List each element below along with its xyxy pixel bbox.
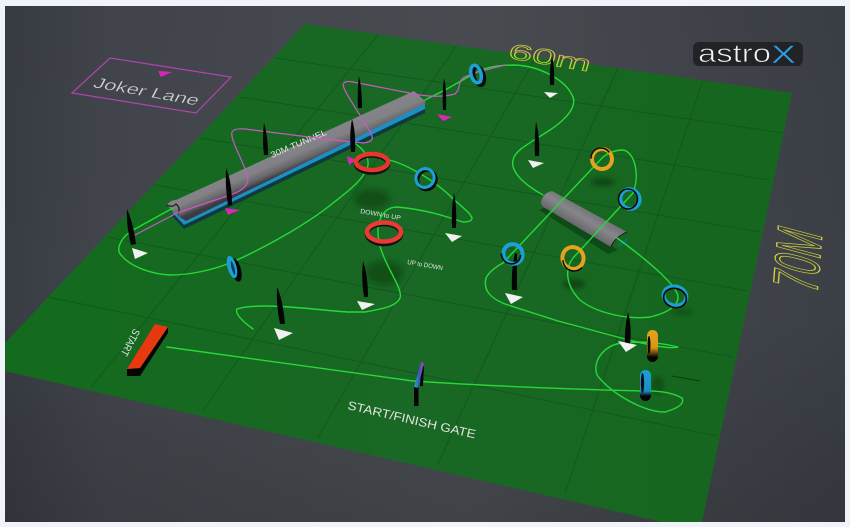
hoop labels: DOWN to UP [360, 208, 401, 222]
astroX logo [693, 38, 803, 69]
orange hoop right [647, 330, 658, 362]
start/finish gate [414, 362, 424, 406]
hoop labels: UP to DOWN [407, 259, 444, 272]
joker lane line: magenta [133, 65, 505, 236]
pole 9 with white arrow [445, 193, 462, 242]
astroX logo: X [771, 41, 796, 69]
blue hoop left [225, 255, 244, 283]
pole 5 [358, 76, 362, 108]
joker lane legend: Joker Lane [90, 75, 203, 109]
orange hoops [559, 145, 658, 362]
field grid [48, 35, 783, 494]
pole 11 with white arrow [357, 261, 375, 310]
joker lane legend [72, 58, 231, 113]
30m tunnel [167, 91, 425, 229]
pole 1 with white arrow [127, 209, 148, 259]
pole 3 [263, 123, 268, 155]
pole 6 with magenta arrow [437, 78, 452, 121]
dimension label: 70M: 70M [760, 220, 836, 299]
pole 13 with white arrow [618, 312, 637, 352]
tunnel label: 30M TUNNEL [269, 127, 328, 160]
start/finish gate label: START/FINISH GATE [346, 398, 477, 441]
pole 7 with white arrow [544, 56, 558, 98]
blue hoop far right [661, 284, 689, 310]
blue hoop bottom right [640, 370, 651, 401]
blue hoop mid [498, 241, 526, 267]
start label: START [117, 327, 142, 358]
second tunnel [539, 191, 628, 254]
small marker on ground [672, 376, 700, 381]
dimension label: 60m: 60m [506, 39, 594, 76]
poles and direction arrows [127, 56, 637, 352]
ground shadows [354, 178, 692, 394]
blue hoops [225, 64, 689, 401]
orange hoop upper [588, 145, 615, 172]
pole 12 with white arrow [274, 287, 293, 340]
hoop labels [360, 208, 444, 272]
astroX logo: astro [698, 38, 771, 68]
blue hoop near 60m [469, 64, 486, 86]
blue hoop centre [413, 166, 439, 193]
start bar [127, 324, 168, 376]
pole 8 with white arrow [528, 122, 544, 168]
pole 10 with white arrow [505, 253, 523, 304]
blue hoop right of tunnel [617, 186, 643, 212]
red hoops [356, 154, 401, 244]
pole 2 with magenta arrow [225, 168, 240, 215]
race line: green [119, 65, 683, 412]
orange hoop lower [559, 244, 588, 274]
pole 4 with magenta arrow [347, 119, 356, 165]
